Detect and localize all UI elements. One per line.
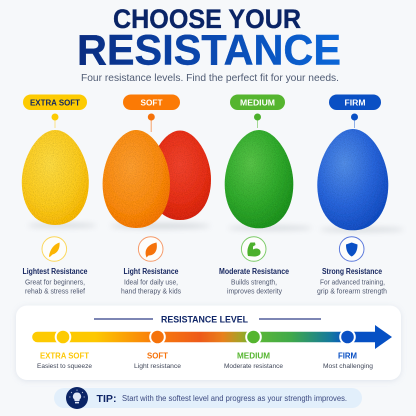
text: light: hand therapy & kids bbox=[121, 286, 181, 296]
text: light: Ideal for daily use, bbox=[124, 278, 178, 286]
scale label: firm bbox=[323, 350, 373, 370]
scale label: soft: Light resistance bbox=[134, 363, 181, 370]
pill: firm bbox=[329, 94, 381, 110]
text: lightest: Lightest Resistance bbox=[22, 267, 88, 276]
title bbox=[77, 4, 341, 74]
egg: yellow bbox=[22, 130, 89, 225]
pill: extra soft bbox=[23, 94, 87, 110]
descriptions bbox=[22, 267, 387, 296]
text: light bbox=[121, 267, 181, 296]
marker: firm bbox=[340, 330, 355, 344]
text: lightest: Great for beginners, bbox=[25, 278, 85, 286]
text: moderate: Moderate Resistance bbox=[219, 267, 290, 276]
pin: green bbox=[254, 114, 261, 128]
text: moderate: improves dexterity bbox=[227, 286, 282, 296]
pill: soft: SOFT bbox=[140, 98, 163, 107]
scale label: extra soft: EXTRA SOFT bbox=[40, 350, 90, 360]
marker: medium bbox=[246, 330, 261, 344]
egg: orange bbox=[103, 130, 170, 228]
text: strong: For advanced training, bbox=[320, 278, 385, 286]
marker: extra soft bbox=[56, 330, 70, 344]
pill: firm: FIRM bbox=[344, 98, 366, 107]
icon: shield bbox=[339, 237, 364, 261]
subtitle: Four resistance levels. Find the perfect fit for your needs. bbox=[81, 73, 339, 84]
icon: light bulb bbox=[66, 387, 88, 409]
marker: soft bbox=[150, 330, 165, 344]
scale label: extra soft bbox=[37, 350, 92, 370]
scale label: medium: MEDIUM bbox=[237, 350, 270, 360]
text: strong: Strong Resistance bbox=[322, 267, 383, 276]
level pills and pins bbox=[23, 94, 381, 132]
scale label: medium bbox=[224, 350, 283, 370]
title: CHOOSE YOUR bbox=[113, 4, 301, 34]
tip bar bbox=[54, 387, 362, 409]
pill: medium bbox=[230, 94, 285, 110]
text: moderate bbox=[219, 267, 290, 296]
pill: soft bbox=[123, 94, 180, 110]
egg: red bbox=[149, 130, 211, 220]
scale label: extra soft: Easiest to squeeze bbox=[37, 363, 92, 370]
text: light: Light Resistance bbox=[124, 267, 179, 276]
scale label: soft bbox=[134, 350, 181, 370]
pill: medium: MEDIUM bbox=[240, 98, 275, 107]
text: strong bbox=[317, 267, 387, 296]
scale label: firm: Most challenging bbox=[323, 363, 373, 370]
egg: blue bbox=[317, 129, 388, 230]
text: lightest bbox=[22, 267, 88, 296]
text: lightest: rehab & stress relief bbox=[25, 286, 85, 296]
icon: leaf bbox=[138, 237, 163, 261]
eggs bbox=[22, 129, 388, 230]
pin: yellow bbox=[52, 114, 58, 128]
icons row bbox=[42, 237, 364, 261]
title: RESISTANCE bbox=[77, 28, 341, 74]
arrow: gradient scale bbox=[32, 325, 392, 349]
pin: blue bbox=[351, 114, 358, 128]
text: strong: grip & forearm strength bbox=[317, 286, 387, 296]
scale label: soft: SOFT bbox=[147, 350, 169, 360]
pill: extra soft: EXTRA SOFT bbox=[30, 98, 80, 107]
icon: flexed arm bbox=[241, 237, 266, 261]
scale label: medium: Moderate resistance bbox=[224, 363, 283, 370]
text: moderate: Builds strength, bbox=[231, 278, 277, 286]
icon: feather bbox=[42, 237, 67, 261]
tip text: Start with the softest level and progress as your strength improves. bbox=[122, 394, 347, 403]
tip label: TIP: bbox=[96, 393, 116, 405]
panel: resistance level bbox=[16, 306, 401, 380]
egg floor shadows bbox=[28, 223, 404, 232]
egg: green bbox=[225, 130, 293, 228]
pin: orange bbox=[148, 114, 155, 132]
scale label: firm: FIRM bbox=[338, 350, 357, 360]
heading: resistance level: RESISTANCE LEVEL bbox=[161, 314, 248, 326]
